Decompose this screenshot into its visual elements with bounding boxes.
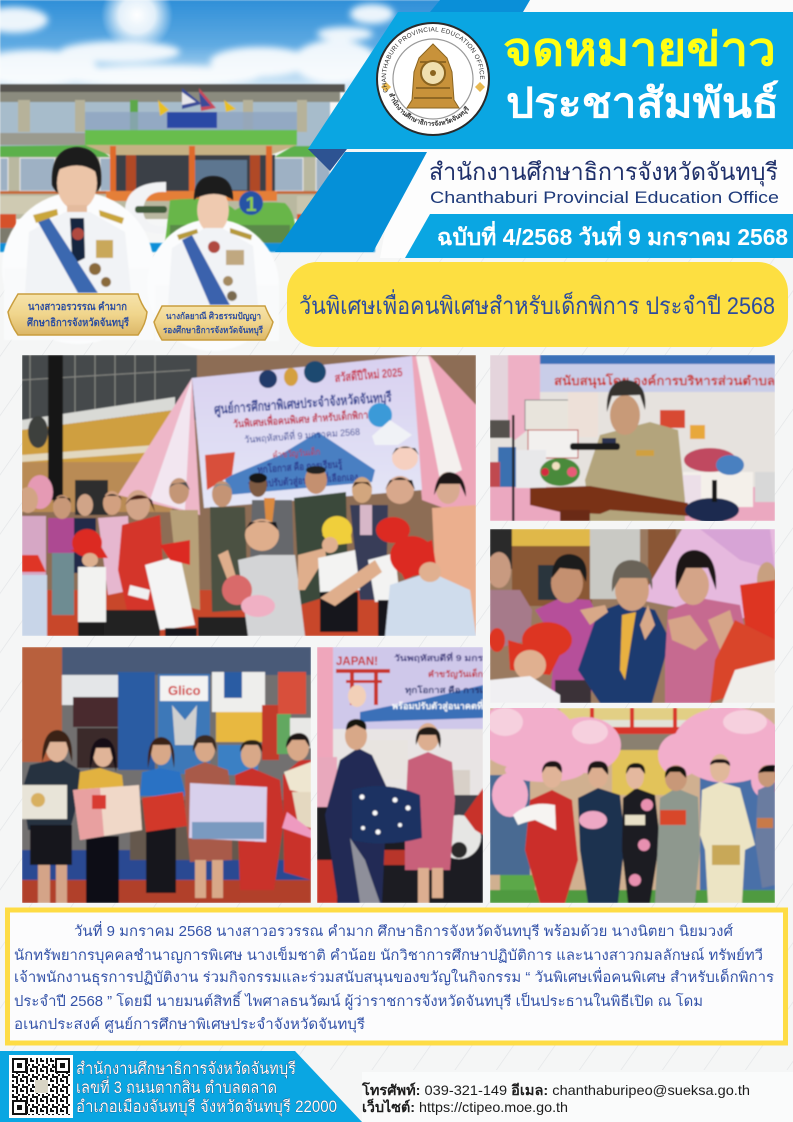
header photo: school building and sky [0, 0, 445, 252]
office address: เลขที่ 3 ถนนตากสิน ตำบลตลาด [76, 1076, 277, 1097]
number 1 badge [239, 191, 263, 216]
left and right green roofs [0, 145, 110, 157]
photo 5: presenting gift on stage: คำขวัญวันเด็ก [428, 667, 483, 680]
news paragraph: ประจำปี 2568 ” โดยมี นายมนต์สิทธิ์ ไพศาลธนวัฒน์ ผู้ว่าราชการจังหวัดจันทบุรี เป็นประธานในพิธีเปิด ณ โดม [14, 990, 703, 1010]
guests [487, 550, 777, 703]
photo 6: women in kimono under cherry blossoms [490, 708, 775, 903]
top blue strip [430, 0, 530, 12]
orange columns [110, 146, 272, 192]
cherry blossom right [658, 707, 783, 798]
photo 2: official speaking at podium [490, 355, 775, 521]
torii gate [336, 669, 390, 705]
speaker in khaki uniform [512, 380, 685, 521]
contact details: โทรศัพท์: 039-321-149 อีเมล: chanthaburipeo@sueksa.go.th [361, 1081, 750, 1098]
QR code [9, 1055, 73, 1118]
office address: อำเภอเมืองจันทบุรี จังหวัดจันทบุรี 22000 [76, 1098, 337, 1117]
clouds [0, 4, 394, 87]
photo 4: group with gift boxes: Glico [168, 683, 201, 698]
lower blue chevron [275, 152, 427, 252]
photo 5: presenting gift on stage: วันพฤหัสบดีที่ 9 มกร [394, 651, 484, 663]
contact details: เว็บไซต์: https://ctipeo.moe.go.th [362, 1098, 568, 1115]
photo 1: stage group with children [22, 355, 476, 636]
news text box [8, 910, 786, 1043]
office name: สำนักงานศึกษาธิการจังหวัดจันทบุรี [429, 159, 778, 187]
photo 5: presenting gift on stage [317, 647, 484, 903]
starry navy gift [352, 786, 422, 844]
photo 1: stage group with children: ทุกโอกาส คือ การเรียนรู้ [257, 457, 343, 477]
title: newsletter: ประชาสัมพันธ์ [506, 80, 779, 126]
white letter C sign [125, 182, 166, 234]
photo 1: stage group with children: สวัสดีปีใหม่ 2025 [334, 364, 403, 385]
gift table display [490, 392, 775, 507]
cherry blossom left [475, 701, 621, 817]
name plaque: director: ศึกษาธิการจังหวัดจันทบุรี [27, 316, 129, 330]
building sign [167, 112, 217, 128]
logo: provincial education office seal: สำนักงานศึกษาธิการจังหวัดจันทบุรี [389, 93, 469, 126]
name plaque: deputy director [154, 306, 273, 340]
dark fold [308, 149, 347, 171]
issue ribbon: ฉบับที่ 4/2568 วันที่ 9 มกราคม 2568 [437, 220, 788, 250]
photo 4: group with gift boxes [22, 647, 311, 903]
woman in pink dress [405, 723, 455, 903]
kimono group [513, 754, 776, 903]
yellow headline panel [287, 262, 788, 347]
news paragraph: นักทรัพยากรบุคคลชำนาญการพิเศษ นางเข็มชาติ คำน้อย นักวิชาการศึกษาปฏิบัติการ และนางสาวกมลลักษณ์ ทรัพย์ทวี [14, 945, 763, 964]
office address [76, 1060, 337, 1117]
gift boxes and sign [22, 783, 311, 842]
blue base bar [0, 243, 375, 252]
title: newsletter [503, 23, 779, 126]
wooden podium [530, 486, 688, 516]
news paragraph: วันที่ 9 มกราคม 2568 นางสาวอรวรรณ คำมาก ศึกษาธิการจังหวัดจันทบุรี พร้อมด้วย นางนิตยา นิยมวงศ์ [74, 921, 734, 940]
name plaque: director: นางสาวอรวรรณ คำมาก [28, 301, 127, 313]
women holding gifts [22, 730, 311, 903]
photo 1: stage group with children: วันพฤหัสบดีที่ 9 มกราคม 2568 [244, 425, 360, 446]
photo 1: stage group with children: วันพิเศษเพื่อคนพิเศษ สำหรับเด็กพิการ [233, 406, 374, 431]
photo 5: presenting gift on stage: ทุกโอกาส คือ การเ [405, 685, 483, 696]
logo: provincial education office seal: CHANTHABURI PROVINCIAL EDUCATION OFFICE [382, 27, 484, 92]
photo 1: stage group with children: ศูนย์การศึกษาพิเศษประจำจังหวัดจันทบุรี [213, 389, 393, 418]
white office band [380, 150, 793, 258]
flags [158, 88, 236, 116]
footer blue panel [0, 1051, 362, 1122]
name plaque: director [8, 294, 147, 335]
green canopy [85, 130, 297, 155]
photo 5: presenting gift on stage: JAPAN! [336, 654, 378, 668]
woman in navy yukata [325, 719, 388, 903]
photo 3: guests applauding [490, 529, 775, 703]
photo 5: presenting gift on stage: พร้อมปรับตัวสู่อนาคตที่ [392, 699, 483, 712]
name plaque: deputy director: รองศึกษาธิการจังหวัดจันทบุรี [163, 325, 263, 336]
sun [101, 0, 173, 51]
news paragraph: อเนกประสงค์ ศูนย์การศึกษาพิเศษประจำจังหวัดจันทบุรี [14, 1016, 365, 1033]
gold diamonds [475, 82, 485, 92]
portrait: director [2, 147, 154, 344]
logo: provincial education office seal [376, 22, 490, 136]
name plaque: deputy director: นางกัลยาณี ศิวธรรมปัญญา [166, 311, 261, 322]
portrait: deputy director [147, 176, 279, 351]
photo 2: official speaking at podium: สนับสนุนโดย องค์การบริหารส่วนตำบล [554, 373, 775, 389]
contact details [361, 1081, 750, 1115]
number 1 badge: 1 [245, 194, 257, 216]
photo 1: stage group with children: พร้อมปรับตัวสู่อนาคตที่เลือกเอง [248, 469, 359, 492]
office name: Chanthaburi Provincial Education Office [430, 188, 779, 207]
main blue banner [308, 12, 793, 149]
gold emblem [407, 44, 459, 108]
photo 1: stage group with children: คำขวัญวันเด็ก [272, 445, 321, 460]
title: newsletter: จดหมายข่าว [503, 23, 776, 75]
news paragraph [14, 921, 774, 1033]
issue ribbon [405, 214, 793, 258]
green shrubs [165, 199, 296, 243]
news paragraph: เจ้าพนักงานธุรการปฏิบัติงาน ร่วมกิจกรรมและร่วมสนับสนุนของขวัญในกิจกรรม “ วันพิเศษเพื่อคนพิเศษ สำหรับเด็กพิการ [14, 967, 774, 986]
office name [429, 159, 779, 207]
office address: สำนักงานศึกษาธิการจังหวัดจันทบุรี [76, 1060, 296, 1079]
